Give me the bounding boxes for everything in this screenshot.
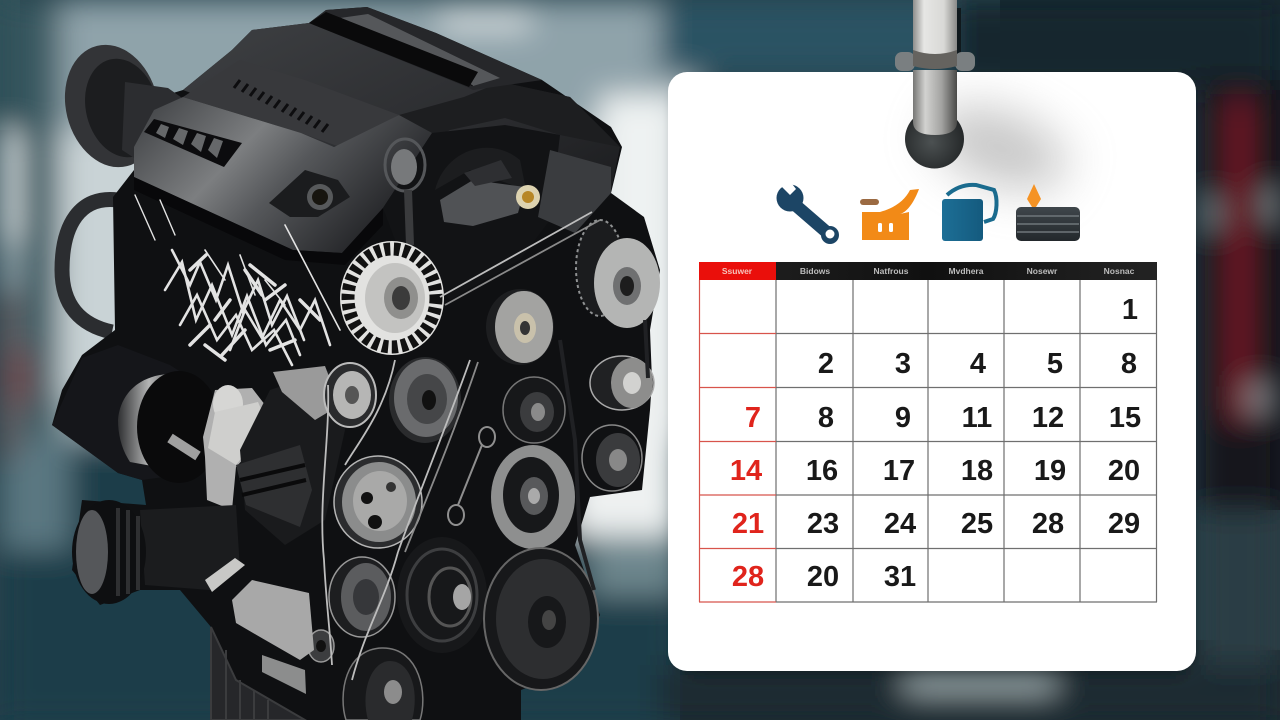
alternator fan xyxy=(340,241,444,355)
calendar dates: 7 xyxy=(745,402,761,434)
pulley: lower right large xyxy=(484,548,598,690)
calendar dates: 12 xyxy=(1032,402,1064,434)
calendar dates: 3 xyxy=(895,348,911,380)
pulley: compressor xyxy=(324,363,376,427)
calendar dates: 23 xyxy=(807,508,839,540)
starter motor xyxy=(52,345,240,483)
pulley: right top xyxy=(590,356,654,410)
dark front panel and cap xyxy=(383,125,560,300)
engine silhouette xyxy=(52,7,660,720)
calendar dates: 2 xyxy=(818,348,834,380)
calendar grid lines xyxy=(776,280,1157,602)
pulley: large centre left xyxy=(334,456,422,548)
icon: orange oil can xyxy=(860,189,919,240)
calendar dates: 20 xyxy=(1108,455,1140,487)
hanger shadow on card xyxy=(922,90,1078,206)
front cover xyxy=(134,97,432,253)
calendar header row: Natfrous xyxy=(874,266,909,276)
oil pan xyxy=(211,627,305,720)
calendar dates: 20 xyxy=(807,561,839,593)
pulley: large centre right xyxy=(491,445,575,549)
upper hood xyxy=(183,23,620,233)
calendar dates: 28 xyxy=(732,561,764,593)
calendar dates: 17 xyxy=(883,455,915,487)
calendar dates: 11 xyxy=(962,402,992,434)
calendar dates: 14 xyxy=(730,455,762,487)
pulley: bottom small xyxy=(308,630,334,662)
grey hood panel xyxy=(183,60,399,147)
tensioner arm xyxy=(448,427,495,525)
cover grille xyxy=(234,80,328,132)
drive belts xyxy=(322,212,648,680)
calendar dates: 24 xyxy=(884,508,916,540)
sensor port xyxy=(269,170,350,217)
black trim under cover xyxy=(134,177,383,265)
calendar dates: 19 xyxy=(1034,455,1066,487)
calendar dates: 4 xyxy=(970,348,986,380)
pulley: lower left xyxy=(329,557,395,637)
calendar card shadow xyxy=(672,80,1196,675)
second hood lobe xyxy=(399,82,620,147)
calendar dates: 8 xyxy=(818,402,834,434)
calendar header row: Nosewr xyxy=(1027,266,1058,276)
lower left fan xyxy=(72,500,240,604)
pulley: idler xyxy=(486,289,554,365)
calendar dates: 16 xyxy=(806,455,838,487)
calendar dates: 5 xyxy=(1047,348,1063,380)
calendar dates xyxy=(730,294,1141,593)
calendar dates: 25 xyxy=(961,508,993,540)
calendar dates: 18 xyxy=(961,455,993,487)
pulley: tension xyxy=(389,357,461,443)
pulley: bottom xyxy=(343,648,423,720)
engine illustration xyxy=(52,7,660,720)
pulley: upper right xyxy=(576,220,660,328)
pulley: lower centre xyxy=(397,537,487,653)
bright casting xyxy=(203,366,345,545)
right valve box xyxy=(538,150,611,233)
calendar dates: 1 xyxy=(1122,294,1138,326)
icon: wrench xyxy=(776,176,839,244)
calendar header row: Ssuwer xyxy=(722,266,753,276)
calendar header row: Nosnac xyxy=(1104,266,1135,276)
calendar dates: 29 xyxy=(1108,508,1140,540)
calendar header row: Bidows xyxy=(800,266,830,276)
silver housing xyxy=(205,558,314,694)
calendar dates: 8 xyxy=(1121,348,1137,380)
calendar header row: Mvdhera xyxy=(949,266,984,276)
calendar dates: 31 xyxy=(884,561,916,593)
calendar dates: 28 xyxy=(1032,508,1064,540)
wiring harness xyxy=(135,195,340,365)
ribbed top plate xyxy=(309,7,542,90)
vent slots xyxy=(144,119,242,167)
icon: blue jug xyxy=(942,185,997,241)
metal hanger clip xyxy=(895,0,975,168)
calendar dates: 9 xyxy=(895,402,911,434)
pulley: dark small xyxy=(503,377,565,443)
pulley: right lower xyxy=(582,425,642,491)
calendar dates: 21 xyxy=(732,508,764,540)
calendar header row xyxy=(699,262,1157,280)
calendar card xyxy=(668,72,1196,671)
icon: flame on tyre stack xyxy=(1016,184,1080,241)
left hose xyxy=(62,199,118,332)
calendar red column lines xyxy=(699,280,776,602)
intake drum xyxy=(52,35,185,177)
calendar dates: 15 xyxy=(1109,402,1141,434)
